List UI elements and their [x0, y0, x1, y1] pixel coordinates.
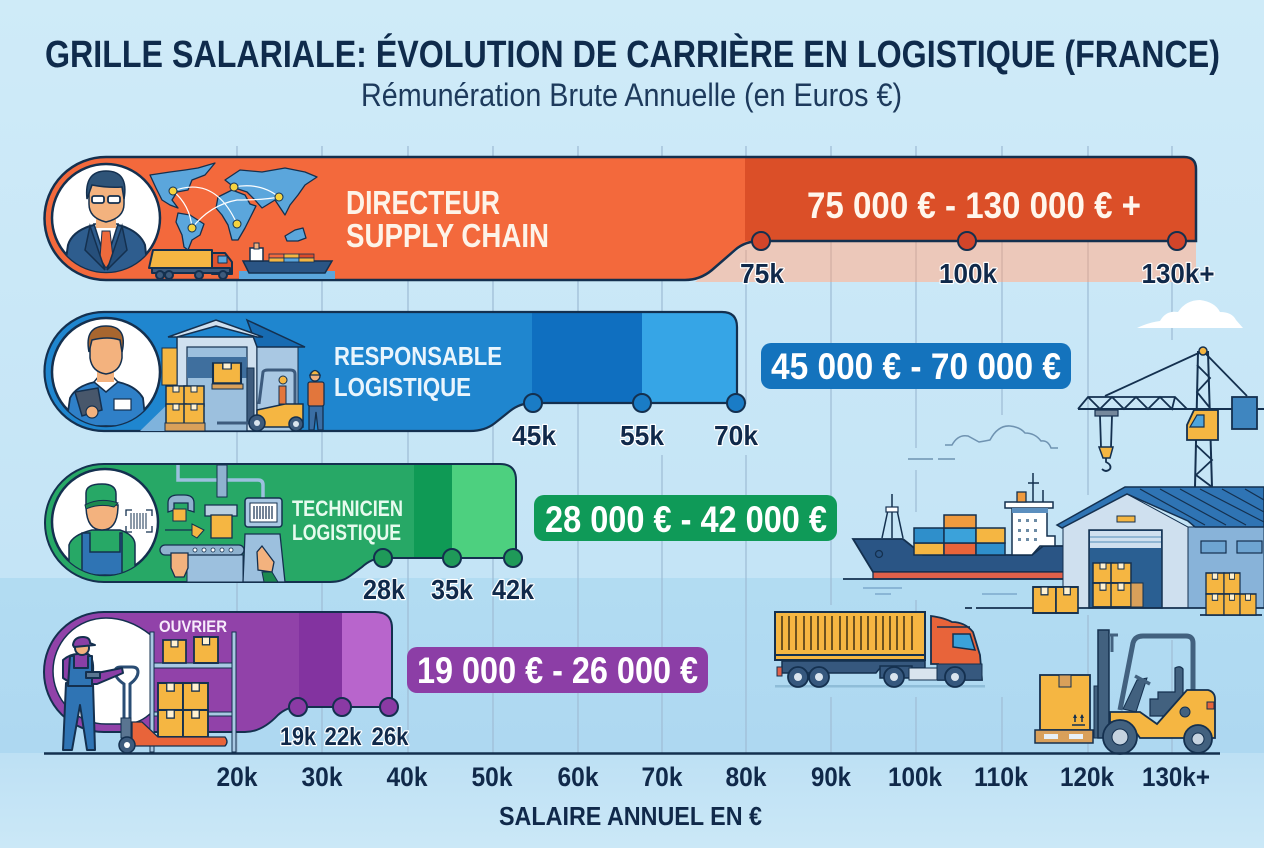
- dark range segment: [745, 157, 1196, 241]
- range markers: directeur: 75k: [740, 258, 784, 289]
- subtitle: Rémunération Brute Annuelle (en Euros €): [361, 77, 902, 113]
- salary pill: responsable: 45 000 € - 70 000 €: [771, 346, 1061, 387]
- icon: container ship: [843, 473, 1064, 594]
- icon: warehouse worker: [63, 637, 123, 750]
- icon: warehouse shelf with boxes: [150, 632, 236, 752]
- axis labels: 120k: [1060, 762, 1115, 792]
- range markers: technicien: [363, 549, 534, 605]
- green bar: [45, 464, 516, 582]
- role label: directeur: [346, 184, 549, 254]
- range segments: [414, 465, 515, 558]
- role label: directeur: SUPPLY CHAIN: [346, 217, 549, 254]
- icon: warehouse with forklift: [140, 320, 324, 431]
- panel: technicien logistique: [45, 464, 837, 605]
- range markers: responsable: 55k: [620, 420, 664, 451]
- role label: technicien: TECHNICIEN: [292, 496, 403, 521]
- axis labels: 20k: [216, 762, 258, 792]
- range markers: responsable: 70k: [714, 420, 758, 451]
- axis labels: 40k: [386, 762, 428, 792]
- avatar backdrop: [53, 618, 152, 724]
- icon: world map: [150, 163, 317, 250]
- range markers: technicien: 35k: [431, 574, 473, 605]
- axis labels: 80k: [726, 762, 767, 792]
- axis title: SALAIRE ANNUEL EN €: [499, 801, 762, 831]
- decoration: cloud: [1137, 300, 1243, 328]
- pale range band: [695, 241, 1196, 282]
- panel: directeur supply chain: [44, 157, 1214, 289]
- axis labels: 50k: [472, 762, 513, 792]
- avatar: technician: [52, 469, 158, 575]
- role label: responsable: RESPONSABLE: [334, 341, 502, 371]
- icon: port crane: [1078, 347, 1264, 487]
- avatar: manager: [52, 318, 160, 426]
- axis labels: 70k: [642, 762, 683, 792]
- axis labels: 90k: [811, 762, 852, 792]
- range markers: ouvrier: 19k: [280, 723, 316, 751]
- axis labels: 130k+: [1142, 762, 1210, 792]
- icon: container truck: [775, 612, 985, 688]
- role label: ouvrier: OUVRIER: [159, 617, 227, 636]
- role label: technicien: [292, 496, 403, 545]
- icon: automated sorting line: [160, 465, 285, 582]
- purple bar: [44, 612, 392, 732]
- avatar: director: [52, 164, 160, 273]
- range markers: ouvrier: 22k: [324, 723, 362, 751]
- range segments: [299, 613, 391, 707]
- range markers: technicien: 28k: [363, 574, 405, 605]
- icon: truck: [149, 250, 232, 279]
- icon: cargo ship: [239, 243, 335, 279]
- range markers: technicien: 42k: [492, 574, 534, 605]
- role label: technicien: LOGISTIQUE: [292, 520, 401, 545]
- role label: responsable: [334, 341, 502, 402]
- role label: responsable: LOGISTIQUE: [334, 372, 471, 402]
- axis labels: 30k: [302, 762, 343, 792]
- axis labels: 110k: [974, 762, 1029, 792]
- range markers: ouvrier: [280, 698, 409, 751]
- orange bar: [44, 157, 1196, 280]
- salary pill: ouvrier: 19 000 € - 26 000 €: [417, 650, 698, 691]
- range markers: responsable: [512, 394, 758, 451]
- role label: directeur: DIRECTEUR: [346, 184, 500, 221]
- range markers: directeur: [740, 232, 1214, 289]
- panel: ouvrier: [44, 612, 708, 753]
- panel: responsable logistique: [45, 312, 1071, 451]
- icon: pallet jack: [115, 667, 227, 753]
- icon: warehouse: [965, 487, 1264, 615]
- range markers: ouvrier: 26k: [372, 723, 409, 751]
- decoration: outline cloud: [908, 426, 1058, 459]
- axis labels: 60k: [558, 762, 599, 792]
- icon: forklift: [1035, 630, 1215, 754]
- axis labels: [216, 762, 1210, 792]
- axis line: [44, 752, 1220, 755]
- range segments: [532, 313, 736, 403]
- range markers: directeur: 130k+: [1142, 258, 1214, 289]
- salary pill: technicien: 28 000 € - 42 000 €: [545, 499, 827, 540]
- range markers: directeur: 100k: [939, 258, 997, 289]
- axis labels: 100k: [888, 762, 943, 792]
- blue bar: [45, 312, 737, 431]
- range markers: responsable: 45k: [512, 420, 556, 451]
- grid lines: [237, 146, 1172, 753]
- salary range: directeur: 75 000 € - 130 000 € +: [807, 185, 1141, 226]
